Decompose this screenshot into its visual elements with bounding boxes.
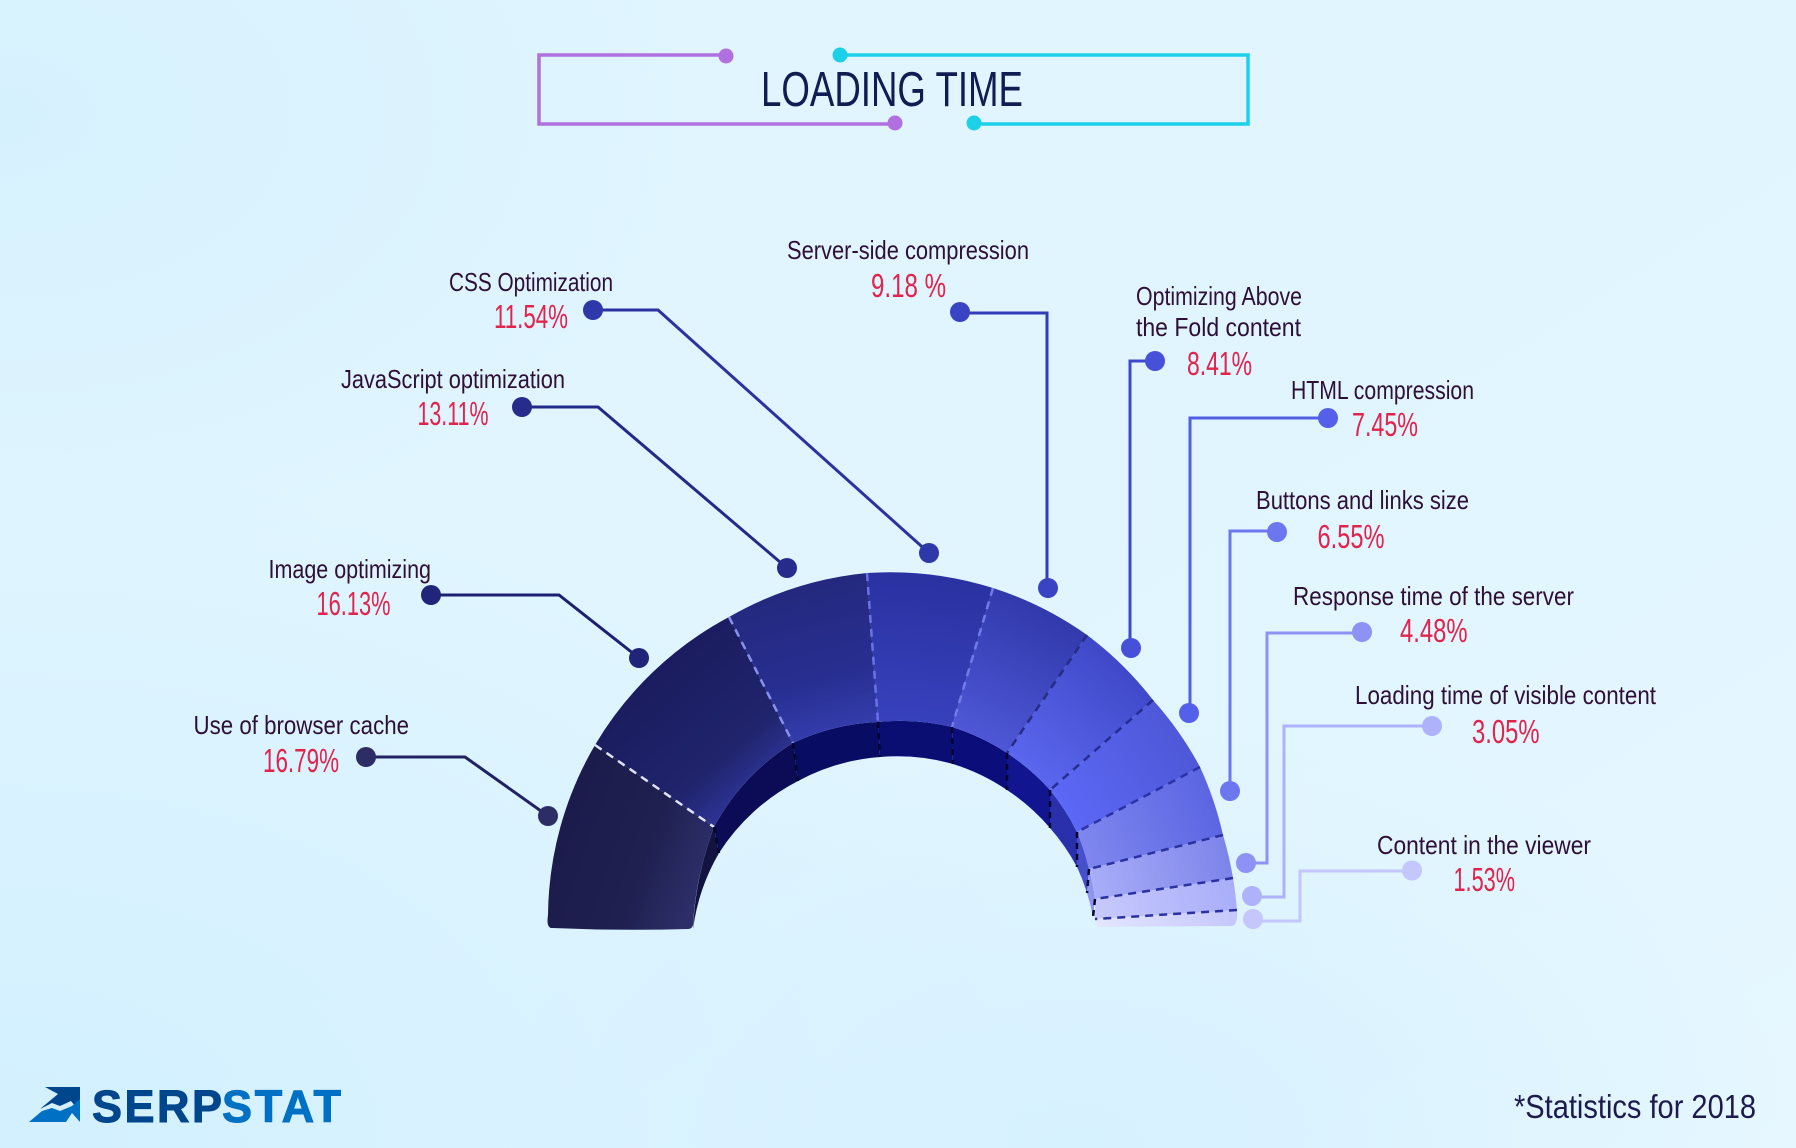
title: LOADING TIME [761, 63, 1023, 117]
segment: optimizing above the fold [1007, 635, 1153, 790]
callout: response time of the server [1236, 581, 1574, 873]
callout: image optimizing [268, 554, 649, 668]
callout: css optimization: CSS Optimization [449, 267, 613, 297]
segment: buttons and links size [1077, 767, 1223, 869]
callout: image optimizing: 16.13% [316, 585, 390, 622]
segment: html compression [1050, 700, 1200, 832]
callout: image optimizing: Image optimizing [268, 554, 431, 584]
callout: response time of the server: 4.48% [1400, 612, 1468, 649]
callout: css optimization [449, 267, 939, 563]
dashed separators [595, 573, 1237, 919]
callout: server-side compression [787, 235, 1058, 598]
callout: content in the viewer [1243, 830, 1591, 929]
icon: logo arrow [29, 1087, 80, 1122]
callout: server-side compression: 9.18 % [871, 267, 946, 304]
callout: html compression [1179, 375, 1474, 723]
footnote: *Statistics for 2018 [1514, 1088, 1756, 1125]
segment: image optimizing [595, 617, 793, 827]
logo: serpstat: STAT [222, 1081, 341, 1132]
callout: use of browser cache: 16.79% [263, 742, 339, 779]
callout: response time of the server: Response time of the server [1293, 581, 1574, 611]
callout: buttons and links size: 6.55% [1318, 518, 1384, 555]
callout: html compression: HTML compression [1291, 375, 1474, 405]
cyan bracket [832, 48, 1248, 130]
logo: serpstat [29, 1081, 341, 1132]
callout: loading time of visible content [1242, 680, 1657, 906]
segment: use of browser cache [548, 745, 714, 930]
callout: server-side compression: Server-side compression [787, 235, 1029, 265]
callout: javascript optimization [341, 364, 797, 578]
callout: javascript optimization: JavaScript optimization [341, 364, 565, 394]
callout: optimizing above the fold content: 8.41% [1187, 345, 1252, 382]
callout: use of browser cache [194, 710, 558, 826]
callout: loading time of visible content: 3.05% [1472, 713, 1540, 750]
title frame and heading [539, 48, 1248, 130]
segment: javascript optimization [729, 573, 878, 743]
callout: css optimization: 11.54% [494, 298, 568, 335]
callout: javascript optimization: 13.11% [418, 395, 488, 432]
callout: loading time of visible content: Loading time of visible content [1355, 680, 1657, 710]
callout: use of browser cache: Use of browser cache [194, 710, 409, 740]
callout: content in the viewer: 1.53% [1454, 861, 1515, 898]
segment: inner walls [693, 721, 1095, 929]
callout: html compression: 7.45% [1352, 406, 1418, 443]
callout: optimizing above the fold content [1121, 281, 1302, 658]
segment: loading time of visible content [1095, 878, 1237, 919]
callout: optimizing above the fold content: Optimizing Above [1136, 281, 1302, 311]
semicircle chart [548, 572, 1237, 930]
callout: content in the viewer: Content in the viewer [1377, 830, 1591, 860]
segment: css optimization [867, 572, 993, 727]
callout: buttons and links size: Buttons and links size [1256, 485, 1469, 515]
callout: buttons and links size [1220, 485, 1469, 801]
purple bracket [539, 48, 902, 130]
segment: server-side compression [952, 588, 1087, 753]
segment: response time [1089, 835, 1233, 899]
segment: content in the viewer [1095, 910, 1237, 927]
wordmark: SERP [92, 1081, 222, 1132]
callout: optimizing above the fold content: the Fold content [1136, 312, 1302, 342]
